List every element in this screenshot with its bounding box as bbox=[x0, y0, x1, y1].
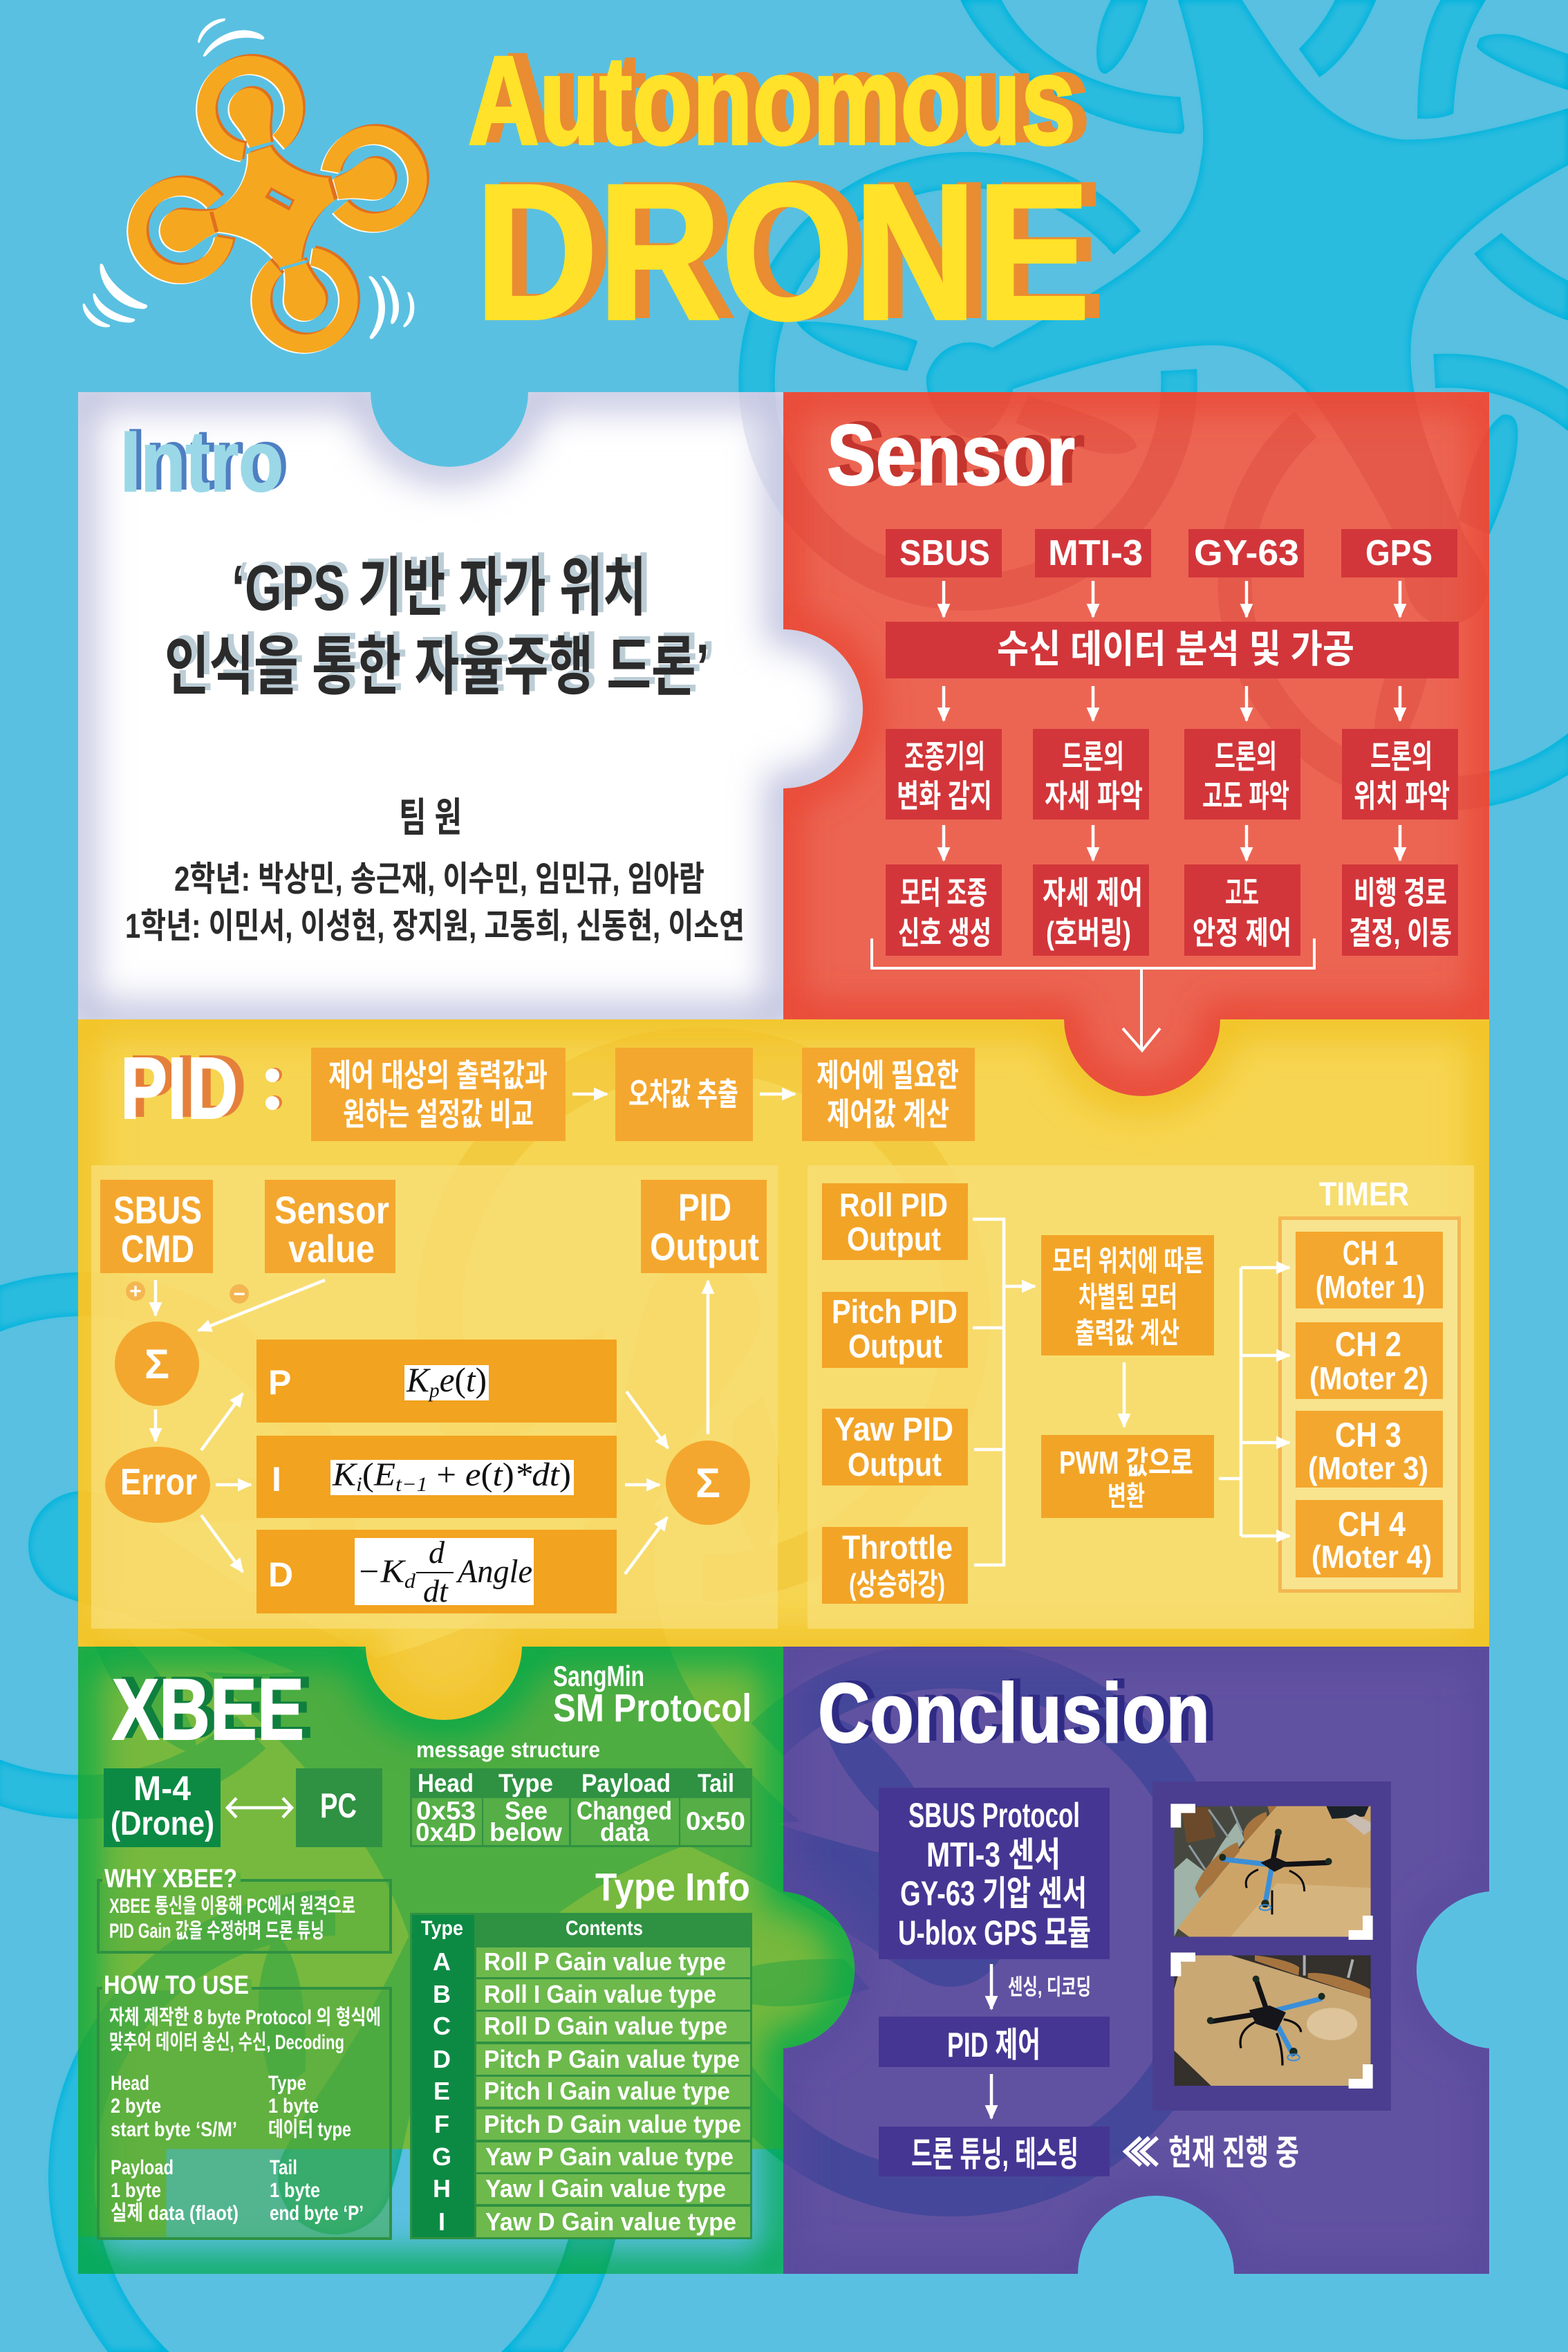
formula: I bbox=[330, 1456, 574, 1496]
team members: 1학년: 이민서, 이성현, 장지원, 고동희, 신동현, 이소연 bbox=[125, 907, 745, 945]
info box: why XBEE: PID Gain 값을 수정하며 드론 튜닝 bbox=[109, 1920, 324, 1943]
heading: SM Protocol bbox=[553, 1660, 752, 1730]
summing node and error node: Σ bbox=[144, 1341, 169, 1387]
message structure table: below bbox=[489, 1818, 562, 1846]
info box: why XBEE: WHY XBEE? bbox=[104, 1864, 237, 1893]
PID definition flow: 제어 대상의 출력값과 bbox=[328, 1057, 548, 1093]
info box: how to use: start byte ‘S/M’ bbox=[111, 2118, 237, 2141]
heading: PID: PID bbox=[129, 1037, 246, 1135]
summing node and error node: Error bbox=[120, 1461, 197, 1503]
arrows: sensors to processing bbox=[944, 581, 1400, 617]
arrows: processing to detection bbox=[944, 686, 1400, 721]
split arrows to motors bbox=[1219, 1268, 1289, 1536]
message structure table: Type bbox=[498, 1769, 553, 1797]
detection row bbox=[886, 729, 1458, 820]
arrow: control to tuning bbox=[990, 2074, 993, 2118]
control row: 안정 제어 bbox=[1193, 915, 1291, 951]
timer channels: CH 4 bbox=[1338, 1505, 1406, 1544]
link diagram: drone and PC: PC bbox=[320, 1786, 357, 1825]
formula: I: E bbox=[374, 1456, 394, 1493]
components box: U-blox GPS 모듈 bbox=[898, 1914, 1091, 1952]
project title text: 인식을 통한 자율주행 드론’ bbox=[165, 631, 709, 703]
info box: how to use: 1 byte bbox=[268, 2095, 319, 2118]
message structure table: 0x53 bbox=[416, 1797, 476, 1825]
link diagram: drone and PC: (Drone) bbox=[111, 1806, 214, 1842]
control row: (호버링) bbox=[1046, 915, 1131, 951]
arrows: detection to control bbox=[944, 825, 1400, 860]
project title text: ‘GPS 기반 자가 위치 bbox=[237, 548, 652, 620]
title: Autonomous bbox=[482, 27, 1090, 168]
PID output boxes: Roll PID bbox=[839, 1187, 948, 1224]
project title text: 인식을 통한 자율주행 드론’ bbox=[170, 627, 715, 699]
info box: how to use: 맞추어 데이터 송신, 수신, Decoding bbox=[109, 2031, 344, 2054]
detection row: 조종기의 bbox=[904, 739, 985, 775]
type info table: A bbox=[433, 1947, 451, 1976]
detection row: 자세 파악 bbox=[1045, 778, 1143, 814]
tuning and testing box: 드론 튜닝, 테스팅 bbox=[911, 2135, 1079, 2174]
type info table: I bbox=[438, 2207, 445, 2236]
input and output boxes: Output bbox=[650, 1225, 759, 1268]
formula: D bbox=[355, 1535, 534, 1609]
type info table: Yaw D Gain value type bbox=[485, 2207, 736, 2236]
plus and minus signs: − bbox=[233, 1283, 245, 1306]
P, I, D term bars: P bbox=[268, 1363, 291, 1402]
formula: D: Angle bbox=[456, 1553, 532, 1590]
team members bbox=[125, 795, 745, 945]
message structure table: Payload bbox=[581, 1769, 671, 1797]
components box: SBUS Protocol bbox=[908, 1796, 1080, 1835]
PWM conversion box bbox=[1041, 1435, 1214, 1518]
message structure table: Changed bbox=[577, 1797, 672, 1825]
logo: drone icon bbox=[83, 19, 430, 355]
P, I, D term bars: D bbox=[268, 1555, 293, 1594]
type info table: Pitch P Gain value type bbox=[484, 2045, 740, 2073]
team members: 2학년: 박상민, 송근재, 이수민, 임민규, 임아람 bbox=[174, 860, 704, 898]
arrows: PID block diagram bbox=[156, 1280, 708, 1574]
link diagram: drone and PC: M-4 bbox=[133, 1769, 191, 1808]
link diagram: drone and PC bbox=[104, 1768, 382, 1847]
info box: how to use: 1 byte bbox=[270, 2179, 320, 2202]
formula: D: −K bbox=[357, 1553, 401, 1590]
input and output boxes: CMD bbox=[121, 1227, 194, 1270]
type info table: Roll P Gain value type bbox=[484, 1947, 726, 1976]
info box: why XBEE: XBEE 통신을 이용해 PC에서 원격으로 bbox=[109, 1895, 355, 1918]
input and output boxes bbox=[100, 1180, 767, 1273]
timer channels: CH 3 bbox=[1335, 1416, 1401, 1454]
message structure table: message structure bbox=[416, 1737, 600, 1762]
timer channels: CH 1 bbox=[1343, 1234, 1398, 1272]
P, I, D term bars bbox=[256, 1340, 617, 1613]
heading: Type Info: Type Info bbox=[595, 1865, 750, 1909]
sensor row: MTI-3 bbox=[1048, 533, 1143, 573]
message structure table: Tail bbox=[698, 1769, 734, 1797]
info box: how to use: Payload bbox=[111, 2156, 174, 2179]
photo: drone on table 1 bbox=[1174, 1806, 1371, 1937]
arrow: calculation to PWM bbox=[1123, 1362, 1126, 1427]
detection row: 드론의 bbox=[1215, 739, 1277, 775]
project title text: ‘GPS 기반 자가 위치 bbox=[232, 552, 646, 624]
timer channels: (Moter 4) bbox=[1312, 1539, 1432, 1575]
plus and minus signs bbox=[126, 1280, 249, 1306]
processing bar: 수신 데이터 분석 및 가공 bbox=[997, 627, 1354, 671]
type info table: Pitch I Gain value type bbox=[484, 2077, 730, 2105]
detection row: 드론의 bbox=[1062, 739, 1124, 775]
PWM conversion box: 변환 bbox=[1108, 1481, 1145, 1512]
PID output boxes: Output bbox=[848, 1447, 942, 1483]
control row: 자세 제어 bbox=[1043, 875, 1143, 911]
input and output boxes: SBUS bbox=[113, 1188, 202, 1232]
sensor row bbox=[886, 529, 1457, 577]
output summing node: Σ bbox=[696, 1460, 720, 1506]
info box: how to use: end byte ‘P’ bbox=[270, 2202, 364, 2225]
status note: in progress: 현재 진행 중 bbox=[1168, 2133, 1299, 2172]
sub-panel: PID block diagram bbox=[91, 1165, 778, 1629]
heading: Sensor: Sensor bbox=[837, 405, 1085, 501]
type info table bbox=[410, 1913, 752, 2239]
heading: Conclusion: Conclusion bbox=[825, 1664, 1217, 1758]
info box: how to use: 실제 data (flaot) bbox=[111, 2202, 239, 2225]
timer channels: (Moter 1) bbox=[1316, 1269, 1425, 1305]
input and output boxes: Sensor bbox=[274, 1188, 389, 1232]
control row: 고도 bbox=[1225, 875, 1259, 911]
motor output calculation box: 모터 위치에 따른 bbox=[1052, 1245, 1204, 1277]
type info table: Type bbox=[421, 1917, 463, 1940]
motor output calculation box bbox=[1041, 1235, 1214, 1355]
PID control box bbox=[879, 2017, 1110, 2067]
heading: Sensor: Sensor bbox=[827, 408, 1075, 503]
message structure table: 0x4D bbox=[416, 1818, 476, 1846]
message structure table: Head bbox=[418, 1769, 474, 1797]
formula: P: (t) bbox=[454, 1360, 487, 1399]
PID output boxes: Output bbox=[847, 1221, 941, 1258]
team members: 팀 원 bbox=[399, 795, 462, 840]
info box: how to use: 자체 제작한 8 byte Protocol 의 형식에 bbox=[109, 2006, 381, 2029]
PID output boxes: (상승하강) bbox=[849, 1568, 945, 1602]
tuning and testing box bbox=[879, 2127, 1110, 2176]
timer channels: CH 2 bbox=[1335, 1325, 1401, 1364]
PID definition flow: 원하는 설정값 비교 bbox=[343, 1096, 534, 1132]
PID output boxes bbox=[822, 1183, 968, 1604]
info box: how to use: Tail bbox=[270, 2156, 297, 2179]
info box: why XBEE bbox=[98, 1864, 391, 1952]
formula: P: e bbox=[440, 1360, 454, 1399]
summing node and error node bbox=[105, 1322, 210, 1523]
title: DRONE bbox=[475, 145, 1090, 360]
formula: D: d bbox=[404, 1570, 416, 1593]
type info table: Pitch D Gain value type bbox=[484, 2110, 741, 2138]
PWM conversion box: PWM 값으로 bbox=[1059, 1445, 1193, 1481]
processing bar bbox=[886, 622, 1459, 678]
timer channels: (Moter 2) bbox=[1309, 1360, 1428, 1396]
sensor row: GPS bbox=[1365, 533, 1432, 573]
info box: how to use: 2 byte bbox=[111, 2095, 161, 2118]
type info table: Roll D Gain value type bbox=[484, 2012, 727, 2040]
type info table: E bbox=[433, 2077, 450, 2105]
control row bbox=[886, 864, 1458, 956]
components box: MTI-3 센서 bbox=[926, 1835, 1061, 1874]
title: Autonomous bbox=[468, 30, 1076, 171]
input and output boxes: value bbox=[288, 1227, 375, 1270]
timer channels bbox=[1280, 1219, 1459, 1591]
PID control box: PID 제어 bbox=[947, 2026, 1040, 2064]
formula: P bbox=[404, 1360, 489, 1402]
timer heading: TIMER bbox=[1319, 1176, 1409, 1213]
formula: P: K bbox=[407, 1360, 429, 1399]
info box: how to use: HOW TO USE bbox=[104, 1971, 249, 2000]
output summing node bbox=[666, 1441, 750, 1525]
PID output boxes: Pitch PID bbox=[832, 1294, 958, 1331]
detection row: 변화 감지 bbox=[897, 778, 992, 814]
formula: I: i bbox=[356, 1473, 362, 1496]
P, I, D term bars: I bbox=[272, 1460, 281, 1499]
input and output boxes: PID bbox=[678, 1185, 731, 1229]
detection row: 위치 파악 bbox=[1354, 778, 1450, 814]
PID definition flow: 제어에 필요한 bbox=[816, 1057, 959, 1093]
formula: P: p bbox=[428, 1379, 440, 1402]
components box: GY-63 기압 센서 bbox=[900, 1874, 1087, 1913]
motor output calculation box: 차별된 모터 bbox=[1079, 1281, 1177, 1313]
detection row: 고도 파악 bbox=[1202, 778, 1289, 814]
status note: in progress bbox=[1126, 2133, 1299, 2172]
message structure table: 0x50 bbox=[686, 1807, 745, 1835]
panel: sensor bbox=[115, 392, 1489, 1714]
type info table: C bbox=[433, 2012, 451, 2040]
panel: intro bbox=[78, 18, 1087, 1019]
message structure table: data bbox=[600, 1818, 649, 1846]
sub-panel: motor output diagram bbox=[808, 1165, 1474, 1629]
formula: D: dt bbox=[423, 1573, 449, 1609]
PID output boxes: Output bbox=[848, 1328, 942, 1365]
plus and minus signs: + bbox=[129, 1280, 142, 1303]
heading: Conclusion: Conclusion bbox=[818, 1666, 1210, 1760]
PID output boxes: Yaw PID bbox=[834, 1411, 953, 1448]
heading: SM Protocol: SM Protocol bbox=[553, 1686, 752, 1730]
type info table: G bbox=[432, 2142, 451, 2171]
title: DRONE bbox=[489, 142, 1105, 358]
info box: how to use: 데이터 type bbox=[268, 2118, 351, 2141]
sensor row: GY-63 bbox=[1194, 533, 1299, 573]
message structure table bbox=[410, 1737, 752, 1847]
timer channels: (Moter 3) bbox=[1308, 1450, 1428, 1486]
type info table: Roll I Gain value type bbox=[484, 1980, 716, 2008]
type info table: D bbox=[433, 2045, 451, 2073]
PID definition flow: 제어값 계산 bbox=[827, 1096, 949, 1132]
PID definition flow: 오차값 추출 bbox=[628, 1076, 738, 1112]
motor output calculation box: 출력값 계산 bbox=[1075, 1317, 1179, 1349]
PID output boxes: Throttle bbox=[842, 1530, 953, 1566]
arrow: sensor outputs down into PID bbox=[872, 938, 1314, 1050]
photo: drone on table 2 bbox=[1174, 1955, 1371, 2086]
control row: 신호 생성 bbox=[898, 915, 991, 951]
formula: I: ( bbox=[362, 1456, 374, 1493]
type info table: Contents bbox=[566, 1917, 643, 1940]
heading: PID: PID bbox=[120, 1039, 238, 1137]
heading: SM Protocol: SangMin bbox=[553, 1660, 644, 1692]
control row: 모터 조종 bbox=[900, 875, 987, 911]
info box: how to use: Head bbox=[111, 2072, 149, 2095]
control row: 결정, 이동 bbox=[1349, 915, 1452, 951]
message structure table: See bbox=[505, 1797, 548, 1825]
info box: how to use: Type bbox=[268, 2072, 306, 2095]
heading: Intro: Intro bbox=[125, 412, 288, 508]
arrow: sensing and decoding: 센싱, 디코딩 bbox=[1008, 1974, 1091, 1999]
formula: I: t−1 bbox=[395, 1473, 428, 1496]
motion lines bbox=[83, 19, 414, 339]
formula: D: d bbox=[429, 1535, 445, 1570]
formula: I: K bbox=[333, 1456, 355, 1493]
heading: XBEE: XBEE bbox=[112, 1662, 304, 1758]
merge bracket arrow bbox=[973, 1219, 1035, 1565]
control row: 비행 경로 bbox=[1354, 875, 1447, 911]
project title text bbox=[165, 548, 715, 703]
formula: I: + bbox=[428, 1456, 465, 1493]
info box: how to use bbox=[98, 1971, 391, 2239]
formula: I: e(t)*dt) bbox=[465, 1456, 570, 1493]
sensor row: SBUS bbox=[899, 533, 990, 573]
type info table: Yaw P Gain value type bbox=[485, 2142, 734, 2171]
type info table: B bbox=[433, 1980, 451, 2008]
type info table: Yaw I Gain value type bbox=[485, 2174, 726, 2203]
type info table: H bbox=[433, 2174, 451, 2203]
heading: XBEE: XBEE bbox=[120, 1660, 312, 1756]
components box bbox=[879, 1788, 1110, 1959]
info box: how to use: 1 byte bbox=[111, 2179, 161, 2202]
title bbox=[468, 27, 1105, 360]
photo corner brackets bbox=[1170, 1804, 1373, 2089]
PID definition flow bbox=[311, 1048, 975, 1141]
photo panel bbox=[1152, 1781, 1391, 2111]
detection row: 드론의 bbox=[1370, 739, 1432, 775]
type info table: F bbox=[434, 2110, 449, 2138]
heading: Intro: Intro bbox=[120, 414, 283, 510]
